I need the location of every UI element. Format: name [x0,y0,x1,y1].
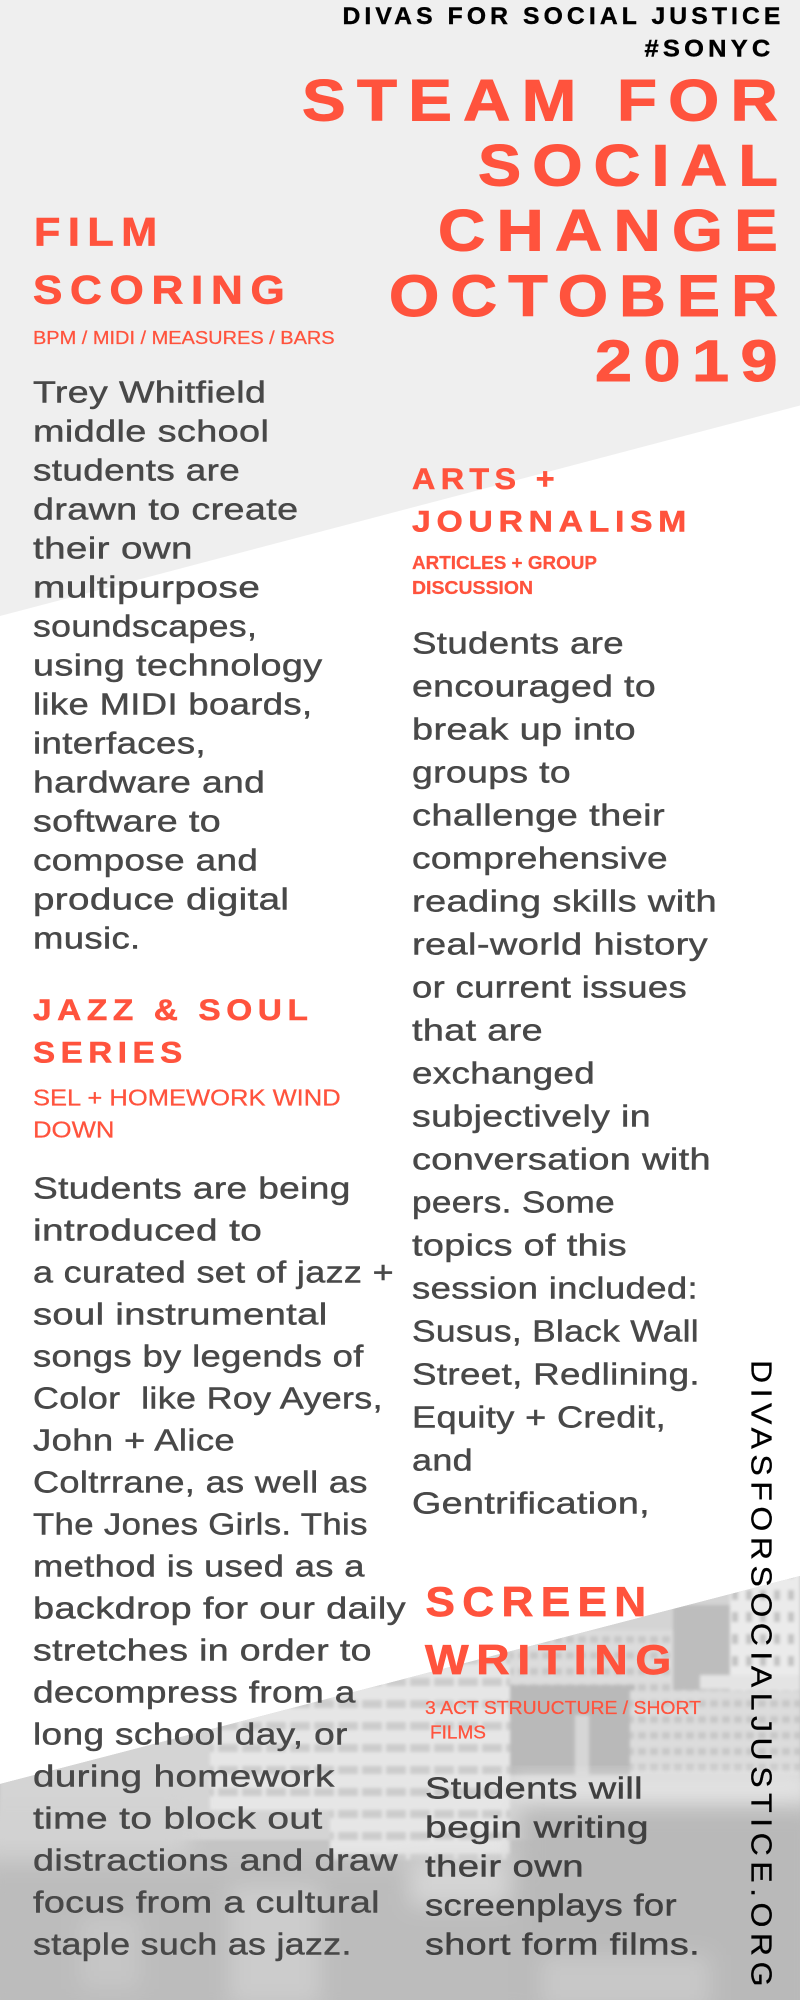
body text: film scoring: multipurpose [33,570,260,604]
body text: arts and journalism: comprehensive [412,841,668,875]
heading: screen writing: WRITING [425,1636,679,1683]
body text: jazz and soul series: during homework [33,1759,335,1793]
panel: jazz and soul series [33,994,407,1961]
body text: film scoring: interfaces, [33,726,206,760]
body text: arts and journalism: reading skills with [412,884,717,918]
body text: jazz and soul series: backdrop for our daily [33,1591,407,1625]
organisation name: DIVAS FOR SOCIAL JUSTICE [342,3,784,30]
body text: jazz and soul series: time to block out [33,1801,323,1835]
body text: screen writing: begin writing [425,1810,649,1844]
heading: arts and journalism: JOURNALISM [412,506,692,539]
body text: film scoring: students are [33,453,240,487]
body text: arts and journalism: real-world history [412,927,709,961]
title: SOCIAL [478,134,789,198]
heading: film scoring [33,211,292,312]
body text: film scoring: middle school [33,414,269,448]
subheading: screen writing: 3 ACT STRUUCTURE / SHORT [425,1697,701,1718]
subheading: jazz and soul series: SEL + HOMEWORK WIND [33,1085,341,1111]
hashtag: #SONYC [644,36,774,62]
body text: film scoring: software to [33,804,221,838]
body text: arts and journalism: topics of this [412,1228,627,1262]
panel: arts and journalism [412,463,717,1520]
body text: arts and journalism: session included: [412,1271,698,1305]
body text: arts and journalism: exchanged [412,1056,595,1090]
body text: film scoring: their own [33,531,193,565]
body text: film scoring: produce digital [33,882,289,916]
body text: jazz and soul series: decompress from a [33,1675,356,1709]
body text: jazz and soul series: soul instrumental [33,1297,328,1331]
body text: arts and journalism [412,626,717,1520]
body text: film scoring: like MIDI boards, [33,687,313,721]
body text: arts and journalism: Street, Redlining. [412,1357,700,1391]
body text: arts and journalism: subjectively in [412,1099,651,1133]
subheading: arts and journalism: DISCUSSION [412,577,533,598]
subheading: screen writing: FILMS [430,1722,486,1743]
body text: arts and journalism: Students are [412,626,624,660]
body text: film scoring [33,375,323,955]
body text: jazz and soul series: staple such as jazz. [33,1927,352,1961]
body text: jazz and soul series: introduced to [33,1213,262,1247]
body text: screen writing: their own [425,1849,584,1883]
body text: jazz and soul series: Students are being [33,1171,351,1205]
body text: film scoring: hardware and [33,765,265,799]
body text: arts and journalism: Gentrification, [412,1486,650,1520]
body text: screen writing: screenplays for [425,1888,677,1922]
body text: jazz and soul series: Color like Roy Ayers, [33,1381,383,1415]
subheading: screen writing [425,1697,701,1743]
body text: jazz and soul series: method is used as a [33,1549,365,1583]
subheading: film scoring: BPM / MIDI / MEASURES / BARS [33,327,335,348]
body text: arts and journalism: challenge their [412,798,665,832]
body text: arts and journalism: encouraged to [412,669,656,703]
vertical website text: DIVASFORSOCIALJUSTICE.ORG [744,1360,776,1992]
body text: film scoring: music. [33,921,141,955]
header: organisation and hashtag [342,3,784,62]
title: OCTOBER [389,264,789,329]
body text: arts and journalism: Equity + Credit, [412,1400,666,1434]
body text: film scoring: using technology [33,648,323,682]
title: CHANGE [438,198,789,264]
body text: arts and journalism: that are [412,1013,543,1047]
body text: arts and journalism: conversation with [412,1142,711,1176]
body text: screen writing: Students will [425,1771,643,1805]
body text: jazz and soul series: distractions and draw [33,1843,399,1877]
heading: arts and journalism: ARTS + [412,463,560,496]
title [302,68,789,394]
body text: jazz and soul series: John + Alice [33,1423,235,1457]
body text: arts and journalism: peers. Some [412,1185,615,1219]
body text: arts and journalism: break up into [412,712,636,746]
title: 2019 [595,329,789,394]
body text: screen writing: short form films. [425,1927,700,1961]
background: city skyline photo [0,1570,800,2000]
heading: film scoring: SCORING [33,269,292,312]
heading: jazz and soul series: JAZZ & SOUL [33,994,314,1027]
subheading: jazz and soul series: DOWN [33,1116,114,1142]
background: grey diagonal panel [0,0,800,616]
body text: jazz and soul series: songs by legends of [33,1339,364,1373]
body text: jazz and soul series: focus from a cultural [33,1885,380,1919]
body text: film scoring: Trey Whitfield [33,375,266,409]
subheading: arts and journalism: ARTICLES + GROUP [412,552,597,573]
body text: jazz and soul series: The Jones Girls. This [33,1507,368,1541]
heading: screen writing: SCREEN [426,1578,654,1625]
heading: film scoring: FILM [34,211,165,254]
title: STEAM FOR [302,68,789,134]
body text: film scoring: drawn to create [33,492,298,526]
body text: jazz and soul series: long school day, or [33,1717,348,1751]
subheading: jazz and soul series [33,1085,341,1142]
heading: jazz and soul series [33,994,314,1069]
body text: film scoring: soundscapes, [33,609,257,643]
body text: jazz and soul series: stretches in order to [33,1633,372,1667]
body text: arts and journalism: groups to [412,755,571,789]
heading: arts and journalism [412,463,692,539]
body text: film scoring: compose and [33,843,258,877]
subheading: arts and journalism [412,552,597,598]
body text: arts and journalism: Susus, Black Wall [412,1314,699,1348]
body text: jazz and soul series: a curated set of jazz + [33,1255,394,1289]
body text: arts and journalism: or current issues [412,970,687,1004]
body text: screen writing [425,1771,700,1961]
body text: jazz and soul series: Coltrrane, as well as [33,1465,368,1499]
panel: screen writing [425,1578,701,1961]
panel: film scoring [33,211,335,955]
heading: jazz and soul series: SERIES [33,1036,188,1069]
body text: arts and journalism: and [412,1443,473,1477]
body text: jazz and soul series [33,1171,407,1961]
heading: screen writing [425,1578,679,1683]
